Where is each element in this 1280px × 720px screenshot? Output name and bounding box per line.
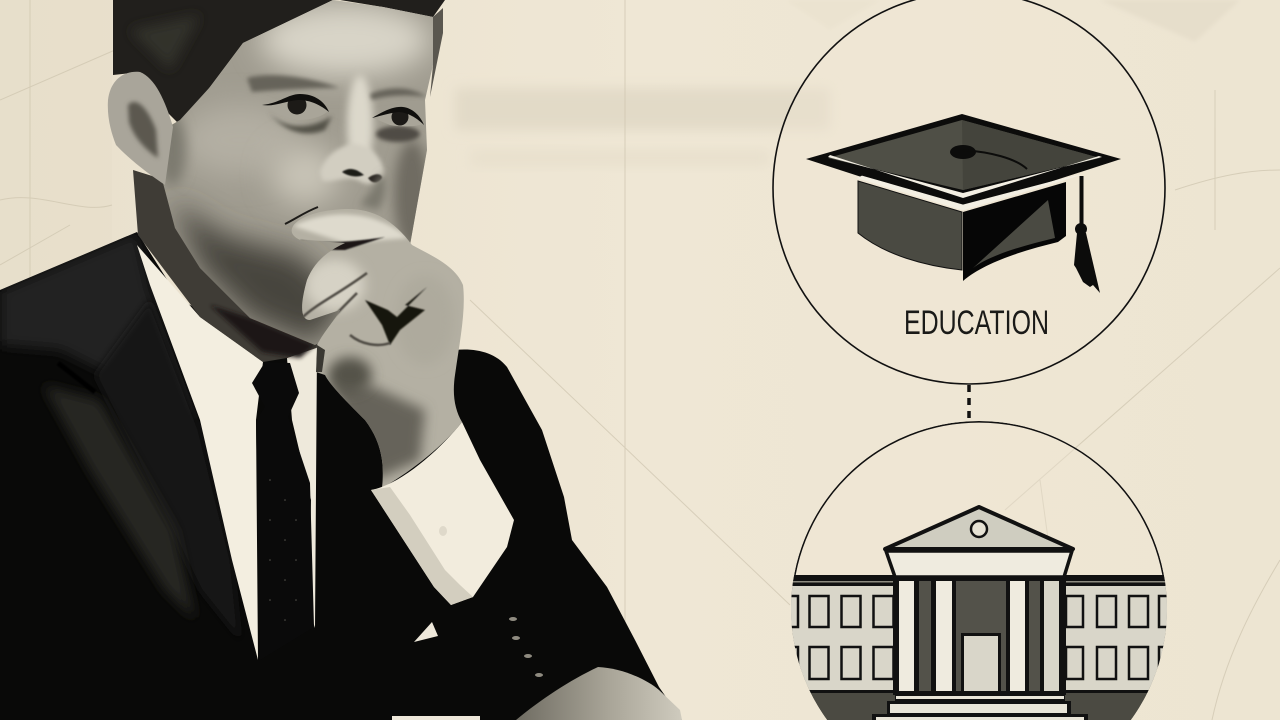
hair (113, 0, 445, 125)
mouth line (285, 207, 318, 224)
jacket shading (0, 232, 240, 640)
hair highlights (130, 15, 200, 70)
face (163, 0, 433, 345)
entablature (886, 551, 1072, 577)
wings (785, 575, 1185, 720)
jacket (0, 232, 682, 720)
lower hand (516, 667, 682, 720)
tie (252, 362, 314, 660)
left eye (262, 94, 332, 133)
left brow (247, 75, 340, 92)
steps (872, 695, 1088, 720)
icon: graduation cap (806, 114, 1121, 293)
shirt front and collar (137, 245, 263, 660)
portrait: man in dark suit, hand on chin (0, 0, 682, 720)
dashed connector (967, 385, 971, 421)
ear (108, 72, 173, 185)
neck dark under chin (210, 305, 315, 358)
hand on chin (292, 209, 464, 487)
nose (320, 144, 385, 210)
windows (782, 596, 1173, 679)
label: education: EDUCATION (904, 304, 1049, 342)
right brow (370, 88, 427, 100)
pediment (885, 507, 1073, 549)
neck shadow (133, 170, 330, 362)
temple hair (430, 8, 443, 97)
finger shadows (300, 237, 385, 250)
right eye (372, 107, 424, 142)
cuff (371, 422, 514, 605)
portico (893, 577, 1066, 695)
sleeve buttons (509, 617, 543, 677)
circle: education (773, 0, 1165, 384)
circle: university building (782, 422, 1185, 720)
right shirt panel (287, 347, 317, 628)
pocket square (414, 622, 438, 642)
paper under hand (392, 716, 480, 720)
icon: university building (782, 507, 1185, 720)
